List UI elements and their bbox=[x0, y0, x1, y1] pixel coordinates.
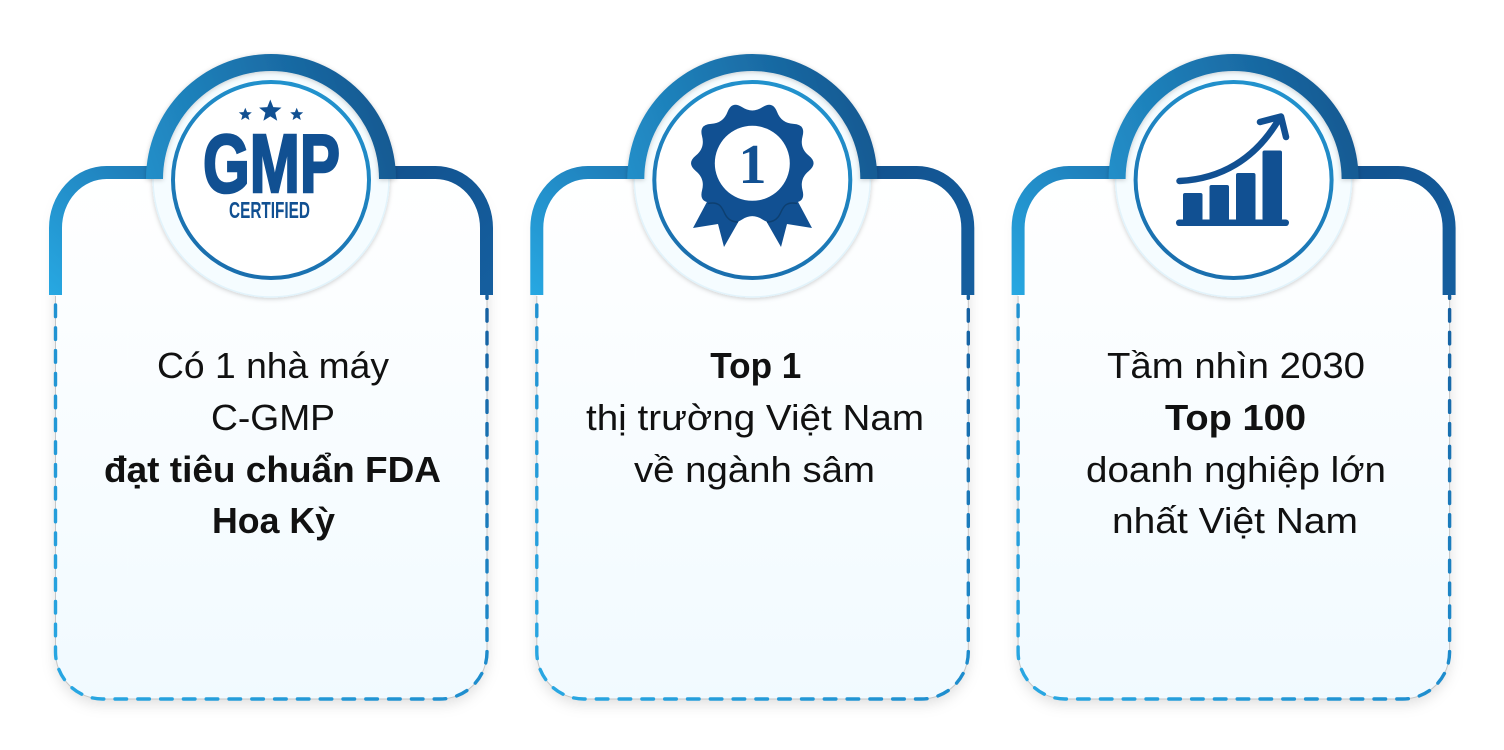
text block: doanh nghiệp lớn bbox=[1086, 449, 1386, 490]
text block: về ngành sâm bbox=[634, 449, 875, 490]
card body bbox=[1018, 172, 1450, 699]
icon: growth chart bbox=[1176, 116, 1289, 226]
icon: award rosette bbox=[691, 105, 814, 247]
top frame left bbox=[537, 172, 651, 295]
top frame right bbox=[856, 172, 968, 295]
icon disc bbox=[153, 61, 389, 297]
icon: award rosette: 1 bbox=[738, 134, 766, 196]
top frame right bbox=[375, 172, 486, 295]
text block: C-GMP bbox=[211, 397, 335, 438]
icon disc bbox=[1116, 61, 1352, 297]
dashed outline bbox=[1018, 296, 1450, 699]
ring bbox=[173, 82, 369, 278]
text block: Tầm nhìn 2030 bbox=[1107, 345, 1365, 386]
text block bbox=[586, 345, 924, 490]
top frame left bbox=[1018, 172, 1133, 295]
dashed outline bbox=[56, 296, 487, 699]
ring bbox=[1136, 82, 1332, 278]
text block: thị trường Việt Nam bbox=[586, 397, 924, 438]
card body bbox=[537, 172, 968, 699]
top frame right bbox=[1338, 172, 1449, 295]
text block: Top 1 bbox=[710, 345, 801, 386]
text block: Có 1 nhà máy bbox=[157, 345, 390, 386]
icon disc bbox=[634, 61, 870, 297]
panel: Top 1 card bbox=[537, 54, 968, 699]
card body bbox=[55, 172, 487, 699]
icon: GMP certified: GMP bbox=[203, 117, 340, 210]
arc bbox=[146, 54, 396, 179]
text block: Hoa Kỳ bbox=[212, 500, 336, 541]
text block: Top 100 bbox=[1165, 397, 1306, 438]
dashed outline bbox=[537, 296, 968, 699]
arc bbox=[627, 54, 877, 179]
panel: Vision 2030 card bbox=[1018, 54, 1450, 699]
panel: GMP card bbox=[55, 54, 487, 699]
top frame left bbox=[56, 172, 170, 295]
icon: GMP certified bbox=[203, 100, 340, 223]
text block bbox=[104, 345, 441, 541]
text block: đạt tiêu chuẩn FDA bbox=[104, 449, 441, 490]
text block bbox=[1086, 345, 1386, 541]
icon: GMP certified: CERTIFIED bbox=[229, 197, 310, 223]
arc bbox=[1109, 54, 1359, 179]
text block: nhất Việt Nam bbox=[1112, 500, 1358, 541]
ring bbox=[654, 82, 850, 278]
